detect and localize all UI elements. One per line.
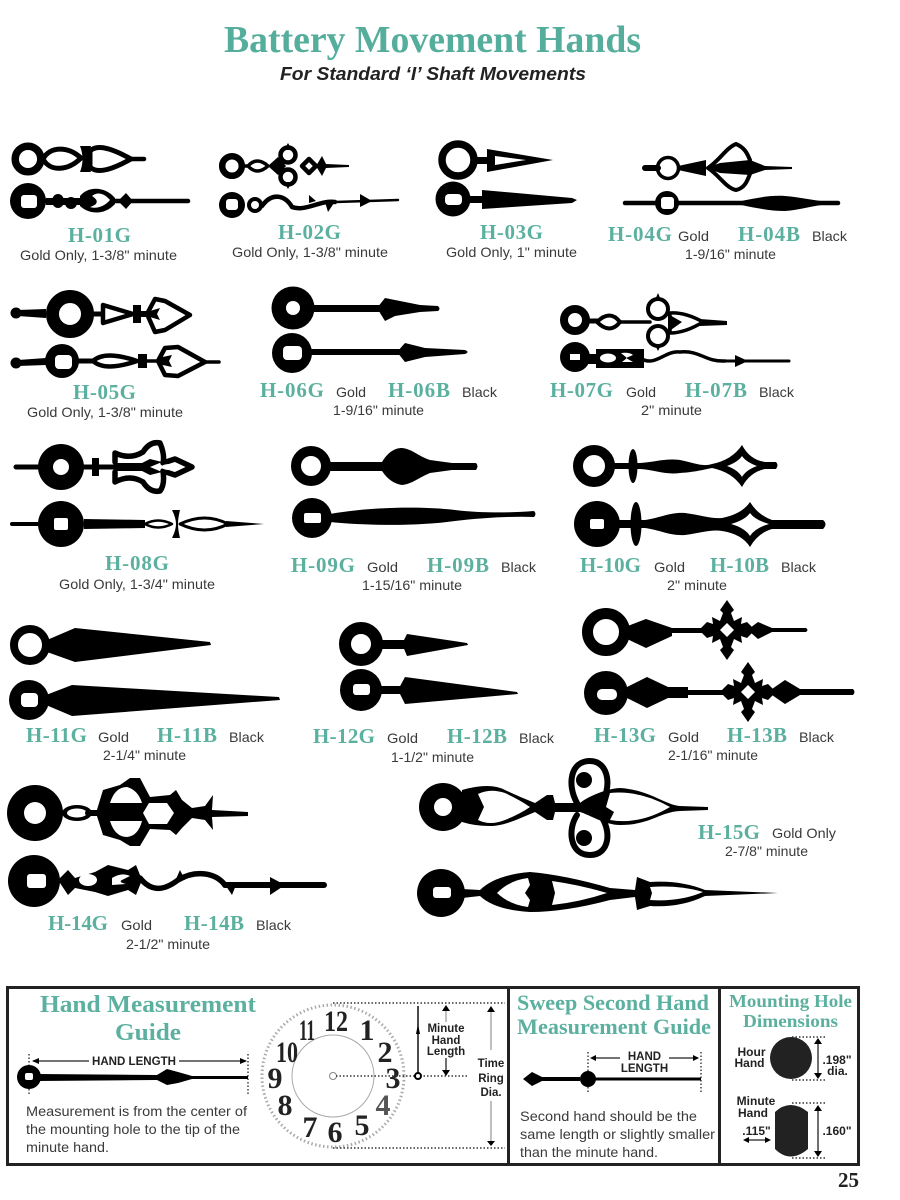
gold text: Gold [678, 228, 709, 244]
product: H-14 [7, 778, 324, 952]
time ring diameter markers: Time [478, 1058, 504, 1070]
hour hand hole: Hour [738, 1045, 766, 1059]
caption: Gold Only, 1-3/4" minute [59, 576, 215, 592]
hour hand hole: .198" [822, 1053, 852, 1067]
caption: 1-9/16" minute [333, 402, 424, 418]
product: H-01 [10, 146, 188, 263]
hour hand [10, 296, 190, 332]
time ring diameter markers: Ring [478, 1073, 504, 1085]
product: H-13 [584, 600, 854, 763]
minute hand hole: .160" [822, 1124, 852, 1138]
minute hand hole [737, 1094, 852, 1158]
hour hand hole [734, 1037, 852, 1080]
minute hand [584, 662, 854, 722]
label gold: H-09G [291, 553, 355, 577]
product: H-05 [10, 296, 219, 420]
black text: Black [462, 384, 498, 400]
minute hand [417, 869, 778, 917]
clock dial: 7 [302, 1111, 318, 1144]
black text: Black [781, 559, 817, 575]
minute hand [625, 191, 838, 215]
minute hand [12, 501, 264, 547]
clock dial: 1 [360, 1014, 374, 1047]
label gold: H-11G [26, 723, 87, 747]
minute hand length marker: Hand [432, 1035, 460, 1047]
gold only text: Gold Only [772, 825, 836, 841]
label gold: H-04G [608, 222, 672, 246]
panel: mounting hole dimensions [729, 991, 852, 1158]
label: H-05G [73, 380, 136, 404]
hour hand [442, 144, 553, 176]
heading line 2: Guide [115, 1020, 181, 1046]
panel: hand measurement guide [17, 992, 505, 1155]
clock dial: 3 [386, 1062, 400, 1095]
label black: H-14B [184, 911, 244, 935]
description: Second hand should be the [520, 1108, 697, 1124]
hour hand [588, 600, 808, 660]
gold text: Gold [98, 729, 129, 745]
hour hand [7, 778, 248, 846]
minute hand [560, 342, 789, 372]
minute hand [340, 669, 518, 711]
label black: H-09B [427, 553, 489, 577]
heading: Sweep Second Hand [517, 990, 709, 1015]
hour hand [345, 628, 468, 660]
panel: sweep second hand guide [517, 990, 715, 1160]
clock dial: 4 [376, 1089, 390, 1122]
caption: Gold Only, 1-3/8" minute [20, 247, 177, 263]
black text: Black [812, 228, 848, 244]
product: H-02 [219, 143, 398, 260]
label gold: H-12G [313, 724, 375, 748]
minute hand length marker: Minute [427, 1023, 465, 1035]
minute hand [436, 182, 577, 216]
label: H-03G [480, 220, 543, 244]
heading line 2: Dimensions [743, 1011, 838, 1031]
minute hand [10, 344, 219, 378]
label: H-15G [698, 820, 760, 844]
caption: Gold Only, 1" minute [446, 244, 577, 260]
heading: Mounting Hole [729, 991, 852, 1011]
minute hand hole: Hand [738, 1106, 768, 1120]
clock dial: 10 [276, 1036, 298, 1069]
label gold: H-13G [594, 723, 656, 747]
hour hand [15, 146, 144, 172]
caption: 2" minute [641, 402, 702, 418]
hand length arrow: LENGTH [621, 1063, 668, 1075]
gold text: Gold [668, 729, 699, 745]
label gold: H-06G [260, 378, 324, 402]
time ring diameter markers [333, 1003, 505, 1148]
time ring diameter markers: Dia. [480, 1087, 502, 1099]
product: H-04 [608, 144, 848, 262]
gold text: Gold [654, 559, 685, 575]
page number: 25 [838, 1168, 859, 1192]
product: H-10 [574, 445, 826, 593]
label black: H-10B [710, 553, 769, 577]
label black: H-07B [685, 378, 747, 402]
clock dial: 5 [354, 1109, 370, 1142]
sample hand [17, 1065, 248, 1089]
label black: H-11B [157, 723, 217, 747]
black text: Black [799, 729, 835, 745]
hand length arrow: HAND [628, 1051, 661, 1063]
clock dial: 12 [324, 1005, 348, 1038]
label black: H-04B [738, 222, 800, 246]
hand length arrow [588, 1051, 701, 1093]
label gold: H-07G [550, 378, 613, 402]
hour hand [14, 628, 211, 662]
minute hand [9, 680, 280, 720]
minute hand [574, 501, 826, 547]
product: H-07 [550, 293, 795, 418]
product: H-09 [291, 448, 537, 593]
description line 2: the mounting hole to the tip of the [26, 1121, 240, 1137]
product: H-12 [313, 628, 555, 765]
gold text: Gold [367, 559, 398, 575]
caption: 1-9/16" minute [685, 246, 776, 262]
minute hand length marker: Length [427, 1046, 465, 1058]
label: H-08G [105, 551, 169, 575]
clock dial: 2 [378, 1036, 392, 1069]
minute hand [272, 333, 468, 373]
label: H-02G [278, 220, 341, 244]
hour hand hole: dia. [827, 1064, 848, 1078]
clock dial: 11 [299, 1014, 315, 1047]
hour hand hole: Hand [734, 1056, 764, 1070]
hour hand [272, 286, 440, 330]
clock dial [262, 1005, 404, 1149]
product: H-11 [9, 628, 280, 763]
minute hand [292, 498, 536, 538]
product: H-15 [417, 761, 836, 917]
caption: 2-7/8" minute [725, 843, 808, 859]
hand length arrow: HAND LENGTH [92, 1056, 176, 1068]
hour hand [564, 293, 727, 351]
title: Battery Movement Hands [224, 19, 641, 61]
hour hand [645, 144, 792, 190]
minute hand hole: .115" [742, 1124, 771, 1138]
caption: 1-15/16" minute [362, 577, 462, 593]
description: Measurement is from the center of [26, 1103, 247, 1119]
black text: Black [501, 559, 537, 575]
caption: 2-1/16" minute [668, 747, 758, 763]
hour hand [419, 761, 708, 855]
label gold: H-10G [580, 553, 641, 577]
black text: Black [519, 730, 555, 746]
gold text: Gold [336, 384, 366, 400]
clock dial: 8 [278, 1089, 292, 1122]
heading: Hand Measurement [40, 992, 256, 1018]
hour hand [296, 448, 478, 485]
product: H-08 [12, 443, 264, 592]
heading line 2: Measurement Guide [517, 1014, 711, 1039]
black text: Black [256, 917, 292, 933]
description line 3: minute hand. [26, 1139, 109, 1155]
caption: 2" minute [667, 577, 727, 593]
minute hand [219, 192, 398, 218]
product: H-06 [260, 286, 498, 418]
description line 2: same length or slightly smaller [520, 1126, 715, 1142]
black text: Black [229, 729, 265, 745]
hour hand [16, 443, 192, 491]
hour hand [578, 445, 778, 487]
minute hand [8, 855, 324, 907]
caption: Gold Only, 1-3/8" minute [27, 404, 183, 420]
caption: 2-1/4" minute [103, 747, 186, 763]
clock dial: 9 [268, 1062, 282, 1095]
caption: 1-1/2" minute [391, 749, 474, 765]
subtitle: For Standard ‘I’ Shaft Movements [280, 64, 586, 84]
gold text: Gold [387, 730, 418, 746]
minute hand [10, 183, 188, 219]
label: H-01G [68, 223, 131, 247]
label black: H-13B [727, 723, 787, 747]
minute hand length marker [415, 1005, 465, 1079]
panel: measurement guides [8, 987, 858, 1165]
product: H-03 [436, 144, 577, 260]
gold text: Gold [121, 917, 152, 933]
caption: 2-1/2" minute [126, 936, 210, 952]
label gold: H-14G [48, 911, 108, 935]
clock dial: 6 [328, 1116, 342, 1149]
minute hand hole: Minute [737, 1094, 776, 1108]
hour hand [222, 143, 349, 189]
black text: Black [759, 384, 795, 400]
label black: H-06B [388, 378, 450, 402]
sample second hand [523, 1071, 701, 1087]
label black: H-12B [447, 724, 507, 748]
description line 3: than the minute hand. [520, 1144, 658, 1160]
gold text: Gold [626, 384, 656, 400]
caption: Gold Only, 1-3/8" minute [232, 244, 388, 260]
hand length arrow [29, 1054, 248, 1094]
